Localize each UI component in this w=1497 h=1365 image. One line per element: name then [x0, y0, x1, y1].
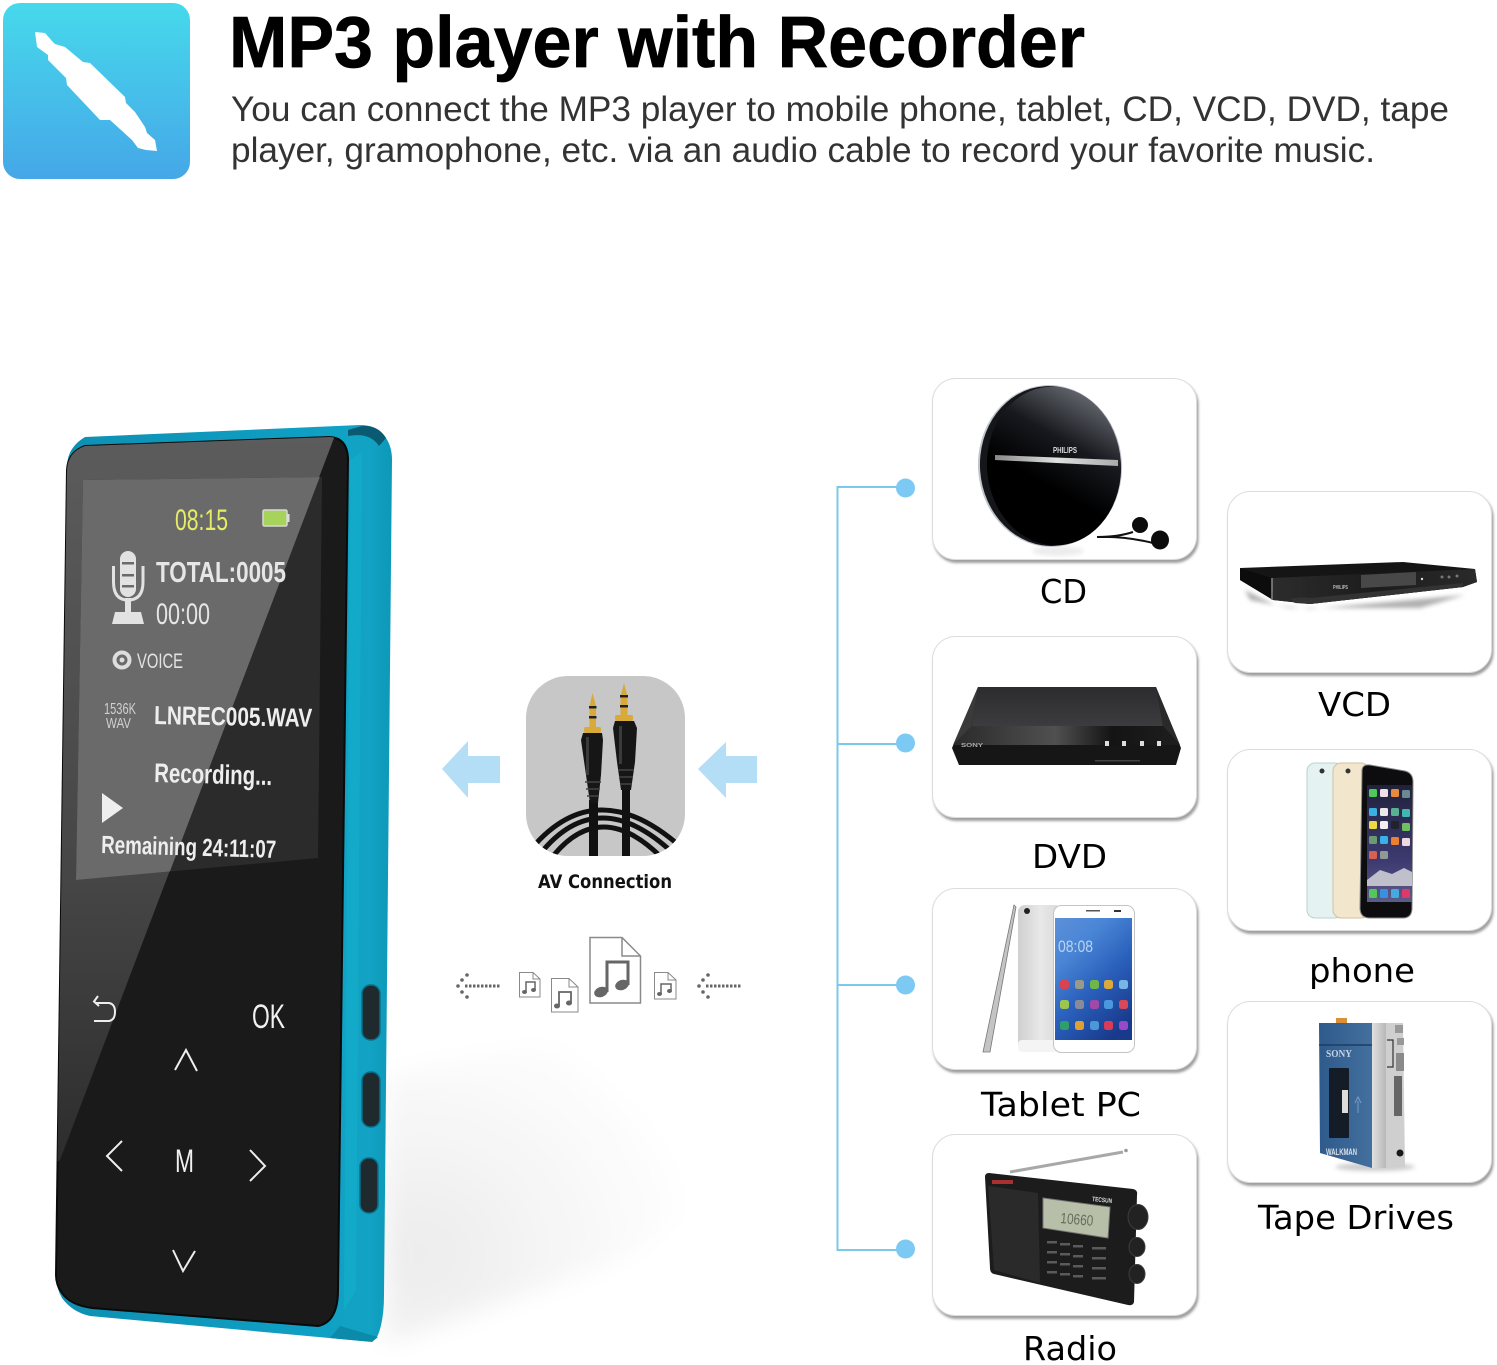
dotted arrow right: [697, 973, 742, 999]
arrow: in from cable: [698, 742, 757, 798]
label: Tablet PC: Tablet PC: [980, 1085, 1141, 1124]
glass reflection: [40, 430, 337, 1172]
bitrate: WAV: [106, 715, 131, 732]
tablet back: [1018, 905, 1062, 1052]
tablet side edge: [983, 905, 1016, 1052]
clock: 08:15: [175, 504, 228, 537]
icon: audio jack badge: [3, 3, 190, 179]
label: CD: CD: [1040, 572, 1087, 611]
recording status: Recording...: [154, 758, 273, 791]
touch buttons: [94, 996, 265, 1271]
VCD player: [1240, 562, 1477, 609]
icon: music file 2: [552, 978, 578, 1012]
panel: Tablet PC: [932, 888, 1196, 1070]
radio: [985, 1149, 1148, 1305]
DVD player: [952, 687, 1181, 765]
player glass: [56, 437, 348, 1326]
gold phone: [1333, 763, 1369, 918]
bitrate: 1536K: [104, 701, 136, 718]
dotted arrow left: [456, 973, 501, 999]
description text: You can connect the MP3 player to mobile phone, tablet, CD, VCD, DVD, tape: [231, 90, 1449, 129]
MP3 player: [40, 425, 392, 1342]
icon: down: [173, 1250, 195, 1271]
reflection: [1032, 546, 1084, 556]
display: [76, 477, 322, 880]
AV connection label: AV Connection: [538, 871, 672, 893]
icon: up: [175, 1050, 197, 1071]
panel: CD: [932, 378, 1196, 560]
icon: back: [94, 996, 115, 1021]
file name: LNREC005.WAV: [154, 700, 313, 733]
OK key: OK: [252, 998, 285, 1036]
DVD player: SONY: [961, 743, 984, 749]
mint phone: [1307, 763, 1343, 918]
AV cable image: [526, 676, 685, 860]
icon: right: [250, 1150, 265, 1181]
CD player disc: PHILIPS: [1053, 446, 1078, 455]
connector lines: [838, 478, 915, 1258]
cassette player: WALKMAN: [1326, 1147, 1357, 1157]
cable coil: [536, 808, 676, 855]
right plug: [613, 683, 637, 790]
tablet front: 08:08: [1058, 937, 1093, 956]
cassette player: [1319, 1018, 1415, 1171]
M key: M: [175, 1143, 194, 1179]
VCD player: PHILIPS: [1333, 585, 1348, 591]
recording count: TOTAL:0005: [156, 557, 286, 589]
icon: left: [107, 1141, 122, 1171]
remaining time: Remaining 24:11:07: [101, 831, 277, 864]
radio: 10660: [1060, 1210, 1094, 1230]
voice label: VOICE: [137, 650, 183, 673]
label: VCD: VCD: [1318, 685, 1391, 724]
description text: player, gramophone, etc. via an audio cable to record your favorite music.: [231, 131, 1375, 170]
icon: music file 1: [520, 972, 540, 997]
panel: Radio: [932, 1134, 1196, 1316]
cassette player: SONY: [1326, 1049, 1353, 1060]
icon: battery: [263, 510, 290, 526]
icon: microphone: [112, 551, 144, 624]
bitrate: [104, 701, 136, 732]
icon: voice source: [114, 652, 130, 668]
panel: VCD: [1228, 492, 1492, 672]
label: Tape Drives: Tape Drives: [1257, 1198, 1454, 1237]
CD player disc: [973, 380, 1127, 552]
elapsed time: 00:00: [156, 598, 210, 631]
description text: [231, 90, 1449, 170]
left plug: [581, 693, 603, 803]
label: phone: phone: [1309, 951, 1415, 990]
earphones: [1097, 517, 1169, 550]
icon: play: [102, 793, 123, 823]
player body: [56, 425, 392, 1341]
icon: large music file: [590, 938, 640, 1003]
floor shadow: [385, 1040, 720, 1345]
side buttons: [360, 985, 380, 1213]
label: DVD: DVD: [1032, 837, 1107, 876]
panel: phone: [1228, 750, 1492, 930]
tablet front: [1054, 906, 1134, 1052]
arrow: out to player: [442, 741, 500, 798]
radio: TECSUN: [1092, 1196, 1113, 1205]
panel: Tape Drives: [1228, 1002, 1492, 1182]
panel: DVD: [932, 636, 1196, 818]
title: MP3 player with Recorder: [229, 3, 1085, 83]
front phone: [1360, 765, 1413, 918]
icon: music file 3: [654, 972, 676, 999]
